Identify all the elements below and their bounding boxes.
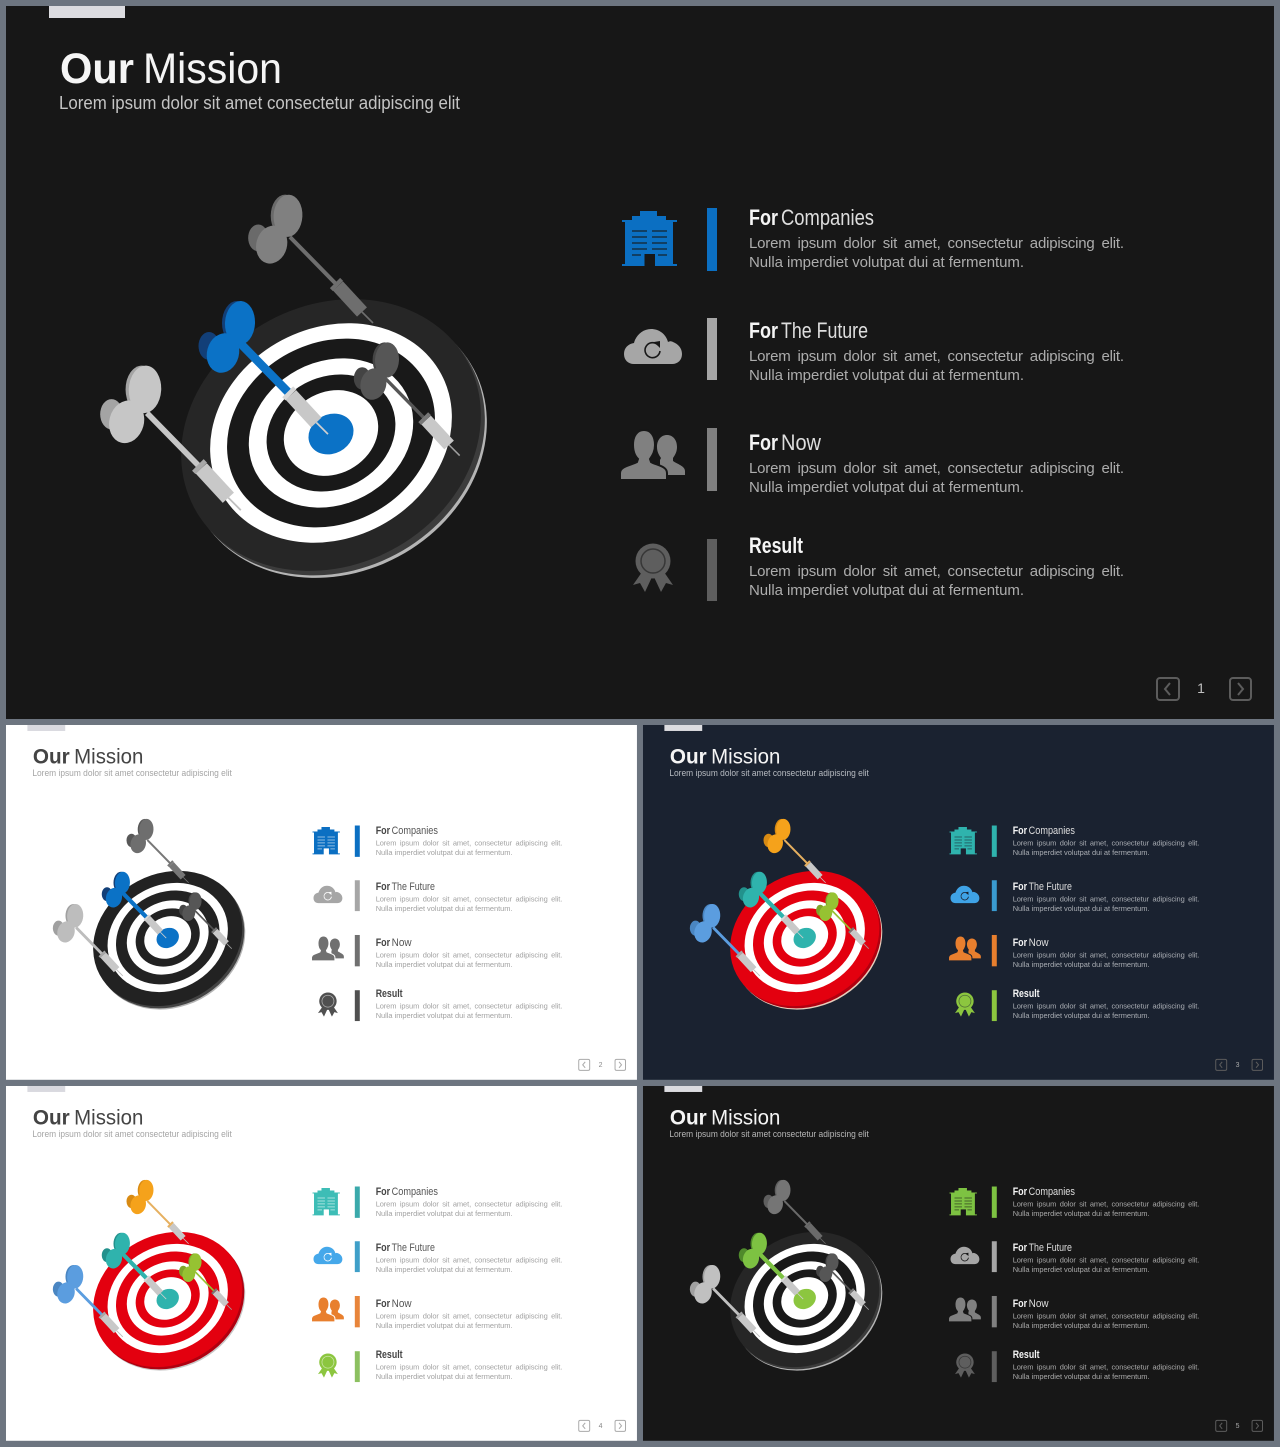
bar: now xyxy=(355,935,360,966)
pager xyxy=(1157,678,1251,700)
title: Our xyxy=(33,1105,70,1129)
icon: people xyxy=(949,936,981,961)
text block: for the future: The Future xyxy=(392,1242,435,1254)
bar: companies xyxy=(355,1187,360,1218)
text block: for the future: Nulla imperdiet volutpat dui at fermentum. xyxy=(376,904,513,913)
text block: for companies xyxy=(376,825,562,857)
title: Mission xyxy=(711,1105,780,1129)
text block: for companies: For xyxy=(749,205,778,230)
icon: cloud xyxy=(951,886,979,903)
darts xyxy=(100,194,460,510)
text block: for companies: For xyxy=(1013,1186,1028,1198)
bar: future xyxy=(707,318,717,380)
text block: for companies: Lorem ipsum dolor sit amet, consectetur adipiscing elit. xyxy=(376,1199,562,1208)
icon: cloud xyxy=(314,886,342,903)
text block: for the future xyxy=(1013,1242,1199,1274)
icon: badge xyxy=(955,992,975,1017)
text block: for now xyxy=(376,937,562,969)
text block: for companies: Lorem ipsum dolor sit amet, consectetur adipiscing elit. xyxy=(376,838,562,847)
pager xyxy=(579,1059,626,1070)
text block: for now: Now xyxy=(781,430,821,455)
darts xyxy=(690,819,869,976)
text block: result: Nulla imperdiet volutpat dui at fermentum. xyxy=(376,1372,513,1381)
text block: for now: Now xyxy=(392,937,412,949)
bar: now xyxy=(992,935,997,966)
dartboard xyxy=(133,247,535,630)
panel: main dark slide xyxy=(6,6,1274,719)
subtitle: Lorem ipsum dolor sit amet consectetur adipiscing elit xyxy=(32,768,232,778)
text block: for the future xyxy=(376,881,562,913)
text block: result: Result xyxy=(376,988,403,1000)
text block: result: Result xyxy=(1013,988,1040,1000)
text block: for the future: Lorem ipsum dolor sit amet, consectetur adipiscing elit. xyxy=(376,895,562,904)
icon: badge xyxy=(955,1353,975,1378)
text block: result xyxy=(749,533,1124,599)
text block: result xyxy=(376,988,562,1020)
title: Mission xyxy=(711,744,780,768)
text block: for now: Nulla imperdiet volutpat dui at fermentum. xyxy=(376,960,513,969)
text block: for companies xyxy=(749,205,1124,271)
title xyxy=(60,45,282,93)
icon: building xyxy=(313,827,340,855)
icon: badge xyxy=(318,1353,338,1378)
text block: for the future: Lorem ipsum dolor sit amet, consectetur adipiscing elit. xyxy=(376,1256,562,1265)
text block: for the future: For xyxy=(376,881,391,893)
pager xyxy=(1216,1420,1263,1431)
text block: result: Lorem ipsum dolor sit amet, consectetur adipiscing elit. xyxy=(1013,1363,1199,1372)
text block: for now xyxy=(376,1298,562,1330)
bar: now xyxy=(992,1296,997,1327)
title: Mission xyxy=(74,1105,143,1129)
darts xyxy=(690,1180,869,1337)
title xyxy=(33,1105,143,1129)
panel: white monochrome slide xyxy=(6,725,637,1080)
title: Mission xyxy=(74,744,143,768)
text block: for the future xyxy=(1013,881,1199,913)
text block: result: Result xyxy=(749,533,804,558)
bar: companies xyxy=(707,208,717,271)
text block: for companies: Companies xyxy=(1029,825,1075,837)
bar: future xyxy=(992,1241,997,1272)
text block: for companies: Lorem ipsum dolor sit amet, consectetur adipiscing elit. xyxy=(749,235,1124,252)
text block: for the future: For xyxy=(376,1242,391,1254)
title: Mission xyxy=(143,45,282,93)
text block: for the future: Lorem ipsum dolor sit amet, consectetur adipiscing elit. xyxy=(1013,1256,1199,1265)
text block: for the future: For xyxy=(1013,881,1028,893)
text block: result: Nulla imperdiet volutpat dui at fermentum. xyxy=(749,582,1024,599)
bar: result xyxy=(707,539,717,601)
text block: for now xyxy=(749,430,1124,496)
text block: for the future: Lorem ipsum dolor sit amet, consectetur adipiscing elit. xyxy=(749,348,1124,365)
text block: for the future: For xyxy=(749,318,778,343)
title: Our xyxy=(670,1105,707,1129)
icon: people xyxy=(620,430,685,480)
panel: black green slide xyxy=(643,1086,1274,1441)
text block: for now: For xyxy=(1013,1298,1028,1310)
icon: cloud xyxy=(951,1247,979,1264)
title xyxy=(670,744,780,768)
text block: for companies: Nulla imperdiet volutpat dui at fermentum. xyxy=(1013,848,1150,857)
text block: result: Result xyxy=(376,1349,403,1361)
text block: for now: Now xyxy=(1029,937,1049,949)
text block: for the future xyxy=(749,318,1124,384)
text block: for companies: Nulla imperdiet volutpat dui at fermentum. xyxy=(376,848,513,857)
text block: for now xyxy=(1013,1298,1199,1330)
pager: 3 xyxy=(1236,1062,1240,1069)
pager: 2 xyxy=(599,1062,603,1069)
text block: for now: Nulla imperdiet volutpat dui at fermentum. xyxy=(749,479,1024,496)
icon: building xyxy=(950,1188,977,1216)
text block: result xyxy=(1013,1349,1199,1381)
darts xyxy=(53,1180,232,1337)
icon: people xyxy=(949,1297,981,1322)
bar: future xyxy=(355,1241,360,1272)
bar: companies xyxy=(355,826,360,857)
text block: for companies: Companies xyxy=(392,825,438,837)
text block: result: Lorem ipsum dolor sit amet, consectetur adipiscing elit. xyxy=(749,563,1124,580)
title: Our xyxy=(670,744,707,768)
text block: for companies: Lorem ipsum dolor sit amet, consectetur adipiscing elit. xyxy=(1013,1199,1199,1208)
text block: result xyxy=(376,1349,562,1381)
bar: companies xyxy=(992,826,997,857)
text block: for now: For xyxy=(1013,937,1028,949)
dartboard xyxy=(706,845,906,1035)
text block: result: Lorem ipsum dolor sit amet, consectetur adipiscing elit. xyxy=(1013,1002,1199,1011)
bar: future xyxy=(355,880,360,911)
text block: for the future: Nulla imperdiet volutpat dui at fermentum. xyxy=(749,367,1024,384)
icon: people xyxy=(312,936,344,961)
bar: result xyxy=(992,990,997,1021)
icon: badge xyxy=(633,544,673,592)
text block: for now: Lorem ipsum dolor sit amet, consectetur adipiscing elit. xyxy=(749,460,1124,477)
pager: 5 xyxy=(1236,1423,1240,1430)
text block: result: Result xyxy=(1013,1349,1040,1361)
pager xyxy=(1216,1059,1263,1070)
subtitle: Lorem ipsum dolor sit amet consectetur adipiscing elit xyxy=(669,1129,869,1139)
text block: result: Lorem ipsum dolor sit amet, consectetur adipiscing elit. xyxy=(376,1363,562,1372)
panel: white colour slide xyxy=(6,1086,637,1441)
icon: cloud xyxy=(624,329,682,364)
bar: future xyxy=(992,880,997,911)
text block: for companies: For xyxy=(1013,825,1028,837)
title: Our xyxy=(33,744,70,768)
title: Our xyxy=(60,45,134,93)
subtitle: Lorem ipsum dolor sit amet consectetur adipiscing elit xyxy=(669,768,869,778)
text block: for now: Lorem ipsum dolor sit amet, consectetur adipiscing elit. xyxy=(376,1311,562,1320)
text block: for now: Nulla imperdiet volutpat dui at fermentum. xyxy=(1013,960,1150,969)
icon: people xyxy=(312,1297,344,1322)
panel: navy colour slide xyxy=(643,725,1274,1080)
text block: for now: For xyxy=(376,937,391,949)
text block: for now: Lorem ipsum dolor sit amet, consectetur adipiscing elit. xyxy=(1013,950,1199,959)
text block: for the future: The Future xyxy=(1029,1242,1072,1254)
text block: for now: Lorem ipsum dolor sit amet, consectetur adipiscing elit. xyxy=(1013,1311,1199,1320)
text block: for companies: Lorem ipsum dolor sit amet, consectetur adipiscing elit. xyxy=(1013,838,1199,847)
darts xyxy=(53,819,232,976)
text block: for the future: The Future xyxy=(781,318,868,343)
text block: for the future: Nulla imperdiet volutpat dui at fermentum. xyxy=(376,1265,513,1274)
dartboard xyxy=(706,1206,906,1396)
icon: badge xyxy=(318,992,338,1017)
dartboard xyxy=(69,845,269,1035)
text block: for now: Nulla imperdiet volutpat dui at fermentum. xyxy=(376,1321,513,1330)
title xyxy=(670,1105,780,1129)
text block: result xyxy=(1013,988,1199,1020)
bar: result xyxy=(992,1351,997,1382)
text block: result: Lorem ipsum dolor sit amet, consectetur adipiscing elit. xyxy=(376,1002,562,1011)
title xyxy=(33,744,143,768)
text block: for companies: Companies xyxy=(1029,1186,1075,1198)
text block: for companies: Companies xyxy=(392,1186,438,1198)
dartboard xyxy=(69,1206,269,1396)
text block: for now: Lorem ipsum dolor sit amet, consectetur adipiscing elit. xyxy=(376,950,562,959)
text block: for the future: Nulla imperdiet volutpat dui at fermentum. xyxy=(1013,904,1150,913)
text block: result: Nulla imperdiet volutpat dui at fermentum. xyxy=(1013,1011,1150,1020)
text block: for the future: Nulla imperdiet volutpat dui at fermentum. xyxy=(1013,1265,1150,1274)
text block: for companies xyxy=(376,1186,562,1218)
icon: building xyxy=(950,827,977,855)
subtitle: Lorem ipsum dolor sit amet consectetur adipiscing elit xyxy=(59,93,460,113)
text block: result: Nulla imperdiet volutpat dui at fermentum. xyxy=(1013,1372,1150,1381)
bar: now xyxy=(707,428,717,491)
text block: for companies: Nulla imperdiet volutpat dui at fermentum. xyxy=(376,1209,513,1218)
text block: for the future: The Future xyxy=(392,881,435,893)
icon: building xyxy=(313,1188,340,1216)
text block: for companies: Nulla imperdiet volutpat dui at fermentum. xyxy=(749,254,1024,271)
text block: for companies xyxy=(1013,825,1199,857)
text block: for the future: Lorem ipsum dolor sit amet, consectetur adipiscing elit. xyxy=(1013,895,1199,904)
text block: for companies: For xyxy=(376,825,391,837)
bar: result xyxy=(355,990,360,1021)
text block: for companies: Companies xyxy=(781,205,874,230)
text block: for companies xyxy=(1013,1186,1199,1218)
text block: for the future: The Future xyxy=(1029,881,1072,893)
icon: building xyxy=(622,211,677,267)
bar: result xyxy=(355,1351,360,1382)
text block: for companies: For xyxy=(376,1186,391,1198)
icon: cloud xyxy=(314,1247,342,1264)
pager: 4 xyxy=(599,1423,603,1430)
text block: result: Nulla imperdiet volutpat dui at fermentum. xyxy=(376,1011,513,1020)
pager: 1 xyxy=(1197,680,1205,696)
text block: for the future: For xyxy=(1013,1242,1028,1254)
bar: now xyxy=(355,1296,360,1327)
text block: for now: Now xyxy=(392,1298,412,1310)
text block: for the future xyxy=(376,1242,562,1274)
text block: for now: For xyxy=(749,430,778,455)
text block: for now: For xyxy=(376,1298,391,1310)
text block: for companies: Nulla imperdiet volutpat dui at fermentum. xyxy=(1013,1209,1150,1218)
subtitle: Lorem ipsum dolor sit amet consectetur adipiscing elit xyxy=(32,1129,232,1139)
bar: companies xyxy=(992,1187,997,1218)
text block: for now xyxy=(1013,937,1199,969)
text block: for now: Now xyxy=(1029,1298,1049,1310)
pager xyxy=(579,1420,626,1431)
text block: for now: Nulla imperdiet volutpat dui at fermentum. xyxy=(1013,1321,1150,1330)
